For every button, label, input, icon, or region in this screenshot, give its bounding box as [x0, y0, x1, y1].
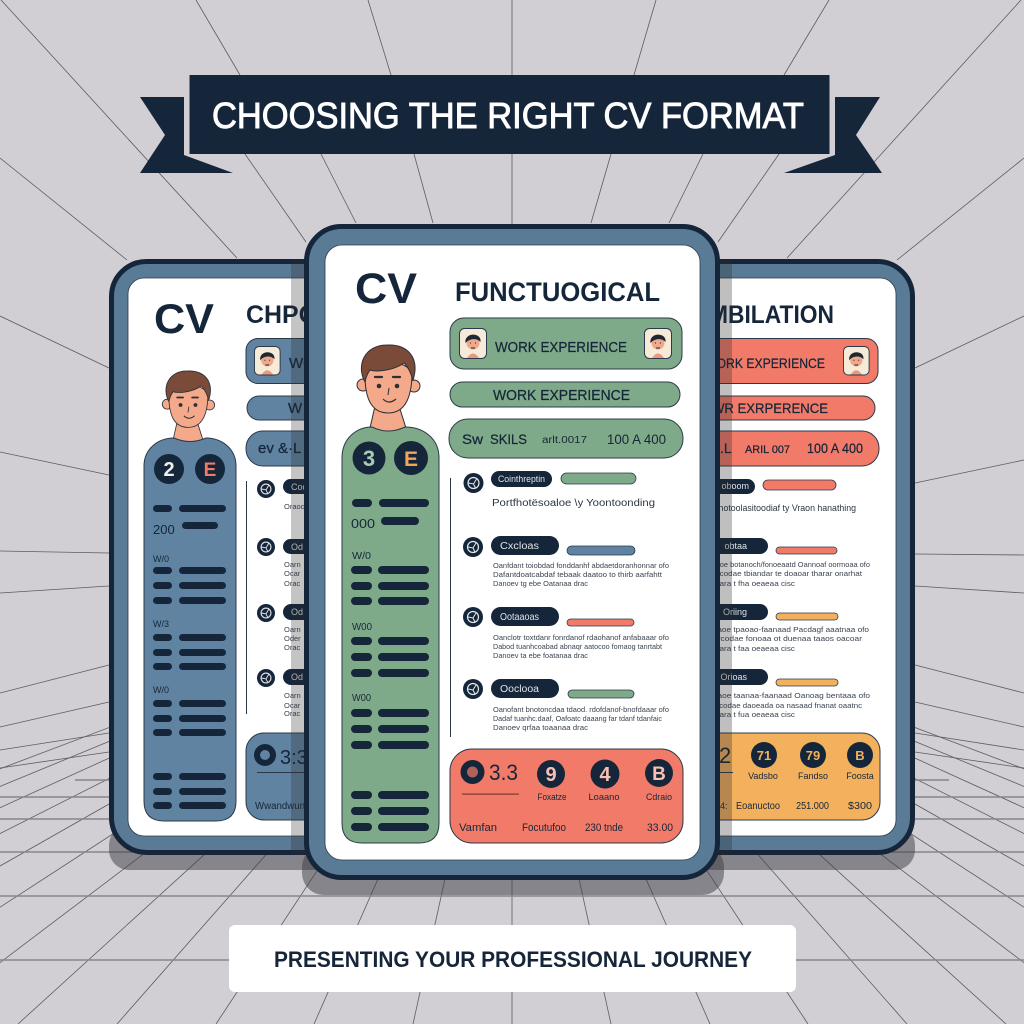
- stat footer row: [459, 822, 673, 834]
- left timeline: Oarn: [284, 625, 301, 634]
- stat footer row: 33.00: [647, 822, 673, 834]
- right timeline text: Oanlaoe taanaa-faanaad Oanoag bentaaa ofo: [700, 691, 870, 700]
- work experience bar: WORK EXPERIENCE: [493, 387, 630, 404]
- timeline item 1: Cointhreptin: [498, 474, 545, 484]
- right timeline text: Danoara t faa oeaeaa cisc: [700, 644, 795, 653]
- timeline item 1: Portfhotësoaloe \y Yoontoonding: [492, 498, 655, 509]
- stat rating: 3.3: [489, 760, 518, 785]
- timeline item 4: Dadaf tuanhc.daaf, Oafoatc daaang far tdanf tdanfaic: [493, 714, 662, 723]
- left sidebar badges: E: [204, 460, 216, 481]
- left sidebar labels: W/0: [153, 554, 169, 564]
- timeline item 2: Cxcloas: [500, 541, 539, 552]
- right stats panel: B: [855, 748, 865, 763]
- left CV heading: CV: [154, 295, 214, 342]
- left timeline: Od: [291, 607, 303, 617]
- panel: combination CV card (right): [412, 262, 912, 852]
- stat badge 9: 9: [545, 764, 557, 786]
- stat footer row: Vamfan: [459, 822, 497, 834]
- left format title: CHPO: [246, 301, 318, 329]
- right timeline text: Dafnrcodae tbiandar te doaoar tharar onarhat: [700, 569, 863, 578]
- sidebar labels: [351, 516, 375, 704]
- stat badge B: Cdraio: [646, 792, 672, 802]
- floor grid: [0, 780, 1024, 960]
- left bar text: WO: [289, 355, 315, 372]
- right bar text: WR EXRPERENCE: [712, 400, 828, 416]
- center card cast shadow, right: [718, 259, 732, 855]
- right timeline text: Danoara t fha oeaeaa cisc: [700, 579, 795, 588]
- work experience bar with portraits: [450, 318, 682, 369]
- right card frame: [412, 262, 912, 852]
- skills bar: arlt.0017: [542, 435, 588, 446]
- right format title: MBILATION: [709, 301, 834, 329]
- right timeline text: Dafnrcodae daoeada oa nasaad fnanat oaatnc: [700, 701, 862, 710]
- timeline item 2: [463, 536, 669, 588]
- left portrait icon: [254, 346, 280, 375]
- right bar text: 100 A 400: [807, 440, 863, 456]
- left timeline: Ocar: [284, 701, 301, 710]
- right timeline text: Danoara t fua oeaeaa cisc: [700, 710, 795, 719]
- left timeline: Oarn: [284, 560, 301, 569]
- stat badge 9: Foxatze: [538, 792, 566, 802]
- left timeline: Od: [291, 672, 303, 682]
- left person illustration: [162, 371, 215, 443]
- center card cast shadow, left: [291, 259, 306, 855]
- sidebar labels: 000: [351, 516, 375, 531]
- person illustration: [357, 345, 420, 432]
- left timeline: Orac: [284, 643, 301, 652]
- right timeline text: Oanlaoe tpaoao-faanaad Pacdagf aaatnaa ofo: [700, 625, 869, 634]
- right stats panel: Fandso: [798, 771, 828, 781]
- right portrait icon: [843, 346, 869, 375]
- right bar text: WORK EXPERIENCE: [705, 355, 825, 371]
- left card frame: [112, 262, 612, 852]
- right header bars: [600, 338, 879, 466]
- left sidebar: [144, 438, 236, 821]
- title banner: [140, 75, 882, 173]
- stat badge 4: Loaano: [588, 792, 620, 802]
- timeline item 4: Danoev qrfaa toaanaa drac: [493, 723, 588, 732]
- stat badge 4: 4: [599, 764, 611, 786]
- right stats panel: Foosta: [846, 771, 874, 781]
- timeline item 3: Ootaaoas: [500, 612, 539, 623]
- left sidebar badges: 2: [163, 459, 175, 481]
- left bar text: W: [288, 400, 303, 417]
- sidebar labels: W00: [352, 693, 371, 704]
- left timeline: Od: [291, 542, 303, 552]
- sidebar bars: [351, 499, 429, 831]
- left sidebar labels: 200: [153, 522, 175, 537]
- caption box: [229, 925, 796, 992]
- right timeline pills and bars: [690, 479, 838, 686]
- timeline item 3: [463, 607, 669, 660]
- left sidebar labels: W/3: [153, 619, 169, 629]
- right stats panel: Vadsbo: [748, 771, 778, 781]
- timeline item 2: Danoev tg ebe Oatanaa drac: [493, 579, 588, 588]
- format title: FUNCTUOGICAL: [455, 277, 660, 307]
- stat rating: [460, 760, 519, 795]
- timeline item 3: Danoev ta ebe foatanaa drac: [493, 651, 588, 660]
- panel: functional CV card (center): [306, 226, 718, 878]
- sidebar badges: 3: [363, 446, 375, 471]
- right timeline text: Dafnrcodae fonoaa ot duenaa taaos oacoar: [700, 634, 863, 643]
- card shadow left and right: [109, 825, 915, 870]
- left timeline: Oarn: [284, 691, 301, 700]
- title: CHOOSING THE RIGHT CV FORMAT: [212, 95, 804, 136]
- left sidebar badges: [154, 454, 225, 484]
- skills bar: [449, 419, 683, 458]
- stats panel: [450, 749, 683, 843]
- skills bar: Sw: [462, 431, 484, 447]
- sidebar labels: W/0: [352, 551, 371, 562]
- CV heading: CV: [355, 265, 417, 313]
- right timeline text: Portfhotoolasitoodiaf ty Vraon hanathing: [700, 503, 856, 514]
- left stats panel: Wwandwun: [255, 801, 305, 812]
- timeline item 4: Oanofant bnotoncdaa tdaod. rdofdanof-bnofdaaar ofo: [493, 705, 669, 714]
- caption text: PRESENTING YOUR PROFESSIONAL JOURNEY: [274, 947, 752, 972]
- right bar text: ARIL 007: [745, 444, 790, 456]
- timeline item 2: Oanfdant toiobdad fonddanhf abdaetdoranhonnar ofo: [493, 561, 669, 570]
- right stats panel: 79: [806, 748, 820, 763]
- work experience bar with portraits: WORK EXPERIENCE: [495, 339, 627, 356]
- panel: chronological CV card (left): [112, 262, 612, 852]
- left stats panel: [246, 733, 446, 820]
- green sidebar: [342, 427, 439, 843]
- left timeline: Oraoc: [284, 502, 305, 511]
- right card page: [500, 278, 896, 836]
- left timeline: Oder: [284, 634, 301, 643]
- skills bar: 100 A 400: [607, 431, 666, 447]
- left timeline: Ocar: [284, 569, 301, 578]
- center card frame: [306, 226, 718, 878]
- left timeline: Orac: [284, 579, 301, 588]
- stat badge B: B: [652, 764, 666, 785]
- right stats panel: 4:: [720, 801, 728, 811]
- stat badge B: [645, 759, 673, 802]
- right timeline text: Oanlaoe botanoch/fonoeaatd Oannoaf oormoaa ofo: [700, 560, 870, 569]
- left sidebar bars: [153, 505, 226, 809]
- sidebar labels: W00: [352, 622, 372, 633]
- stat badge 4: [588, 760, 620, 802]
- right timeline pills and bars: Oriing: [723, 607, 747, 617]
- stat footer row: 230 tnde: [585, 822, 623, 834]
- timeline item 1: [464, 471, 655, 509]
- timeline item 3: Dabod tuanhcoabad abnaqr aatocoo fomaog tanrtabt: [493, 642, 663, 651]
- work experience bar: [450, 382, 680, 407]
- right stats panel: $300: [848, 801, 872, 812]
- right timeline pills and bars: Orioas: [720, 672, 747, 682]
- banner body: [190, 75, 830, 154]
- left bar text: ev &·L: [258, 440, 301, 457]
- stat footer row: Focutufoo: [522, 822, 566, 834]
- banner right tail: [784, 97, 882, 173]
- center card page: [325, 245, 700, 860]
- right stats panel: [600, 733, 880, 820]
- right timeline pills and bars: oboom: [721, 481, 749, 491]
- sidebar badges: [352, 441, 428, 475]
- left timeline: [246, 479, 333, 718]
- left timeline: Cod: [291, 482, 308, 492]
- timeline item 2: Dafantdoatcabdaf tebaak daatoo to thirb aarfahtt: [493, 570, 663, 579]
- timeline line: [450, 478, 451, 737]
- right timeline text: [700, 503, 870, 719]
- stat badge 9: [537, 760, 566, 802]
- timeline item 4: Ooclooa: [500, 684, 539, 695]
- banner left tail: [140, 97, 233, 173]
- left stats panel: 3:3: [280, 747, 308, 769]
- left card page: [128, 278, 528, 836]
- card shadow center: [302, 845, 724, 895]
- timeline item 3: Oanclotr toxtdanr fonrdanof rdaohanof anfabaaar ofo: [493, 633, 669, 642]
- right stats panel: 251.000: [796, 801, 829, 812]
- left header bars: [246, 338, 447, 466]
- timeline item 4: [463, 679, 669, 732]
- left timeline: Orac: [284, 709, 301, 718]
- right stats panel: Eoanuctoo: [736, 801, 780, 812]
- left sidebar labels: W/0: [153, 685, 169, 695]
- right bar text: .L: [720, 440, 732, 456]
- right bar text: [705, 355, 863, 456]
- skills bar: SKILS: [490, 431, 527, 447]
- right stats panel: 2: [719, 743, 731, 768]
- left sidebar labels: [153, 522, 175, 695]
- right stats panel: 71: [757, 748, 771, 763]
- right timeline pills and bars: obtaa: [724, 541, 747, 551]
- left bar text: [258, 355, 315, 457]
- sidebar badges: E: [404, 448, 418, 471]
